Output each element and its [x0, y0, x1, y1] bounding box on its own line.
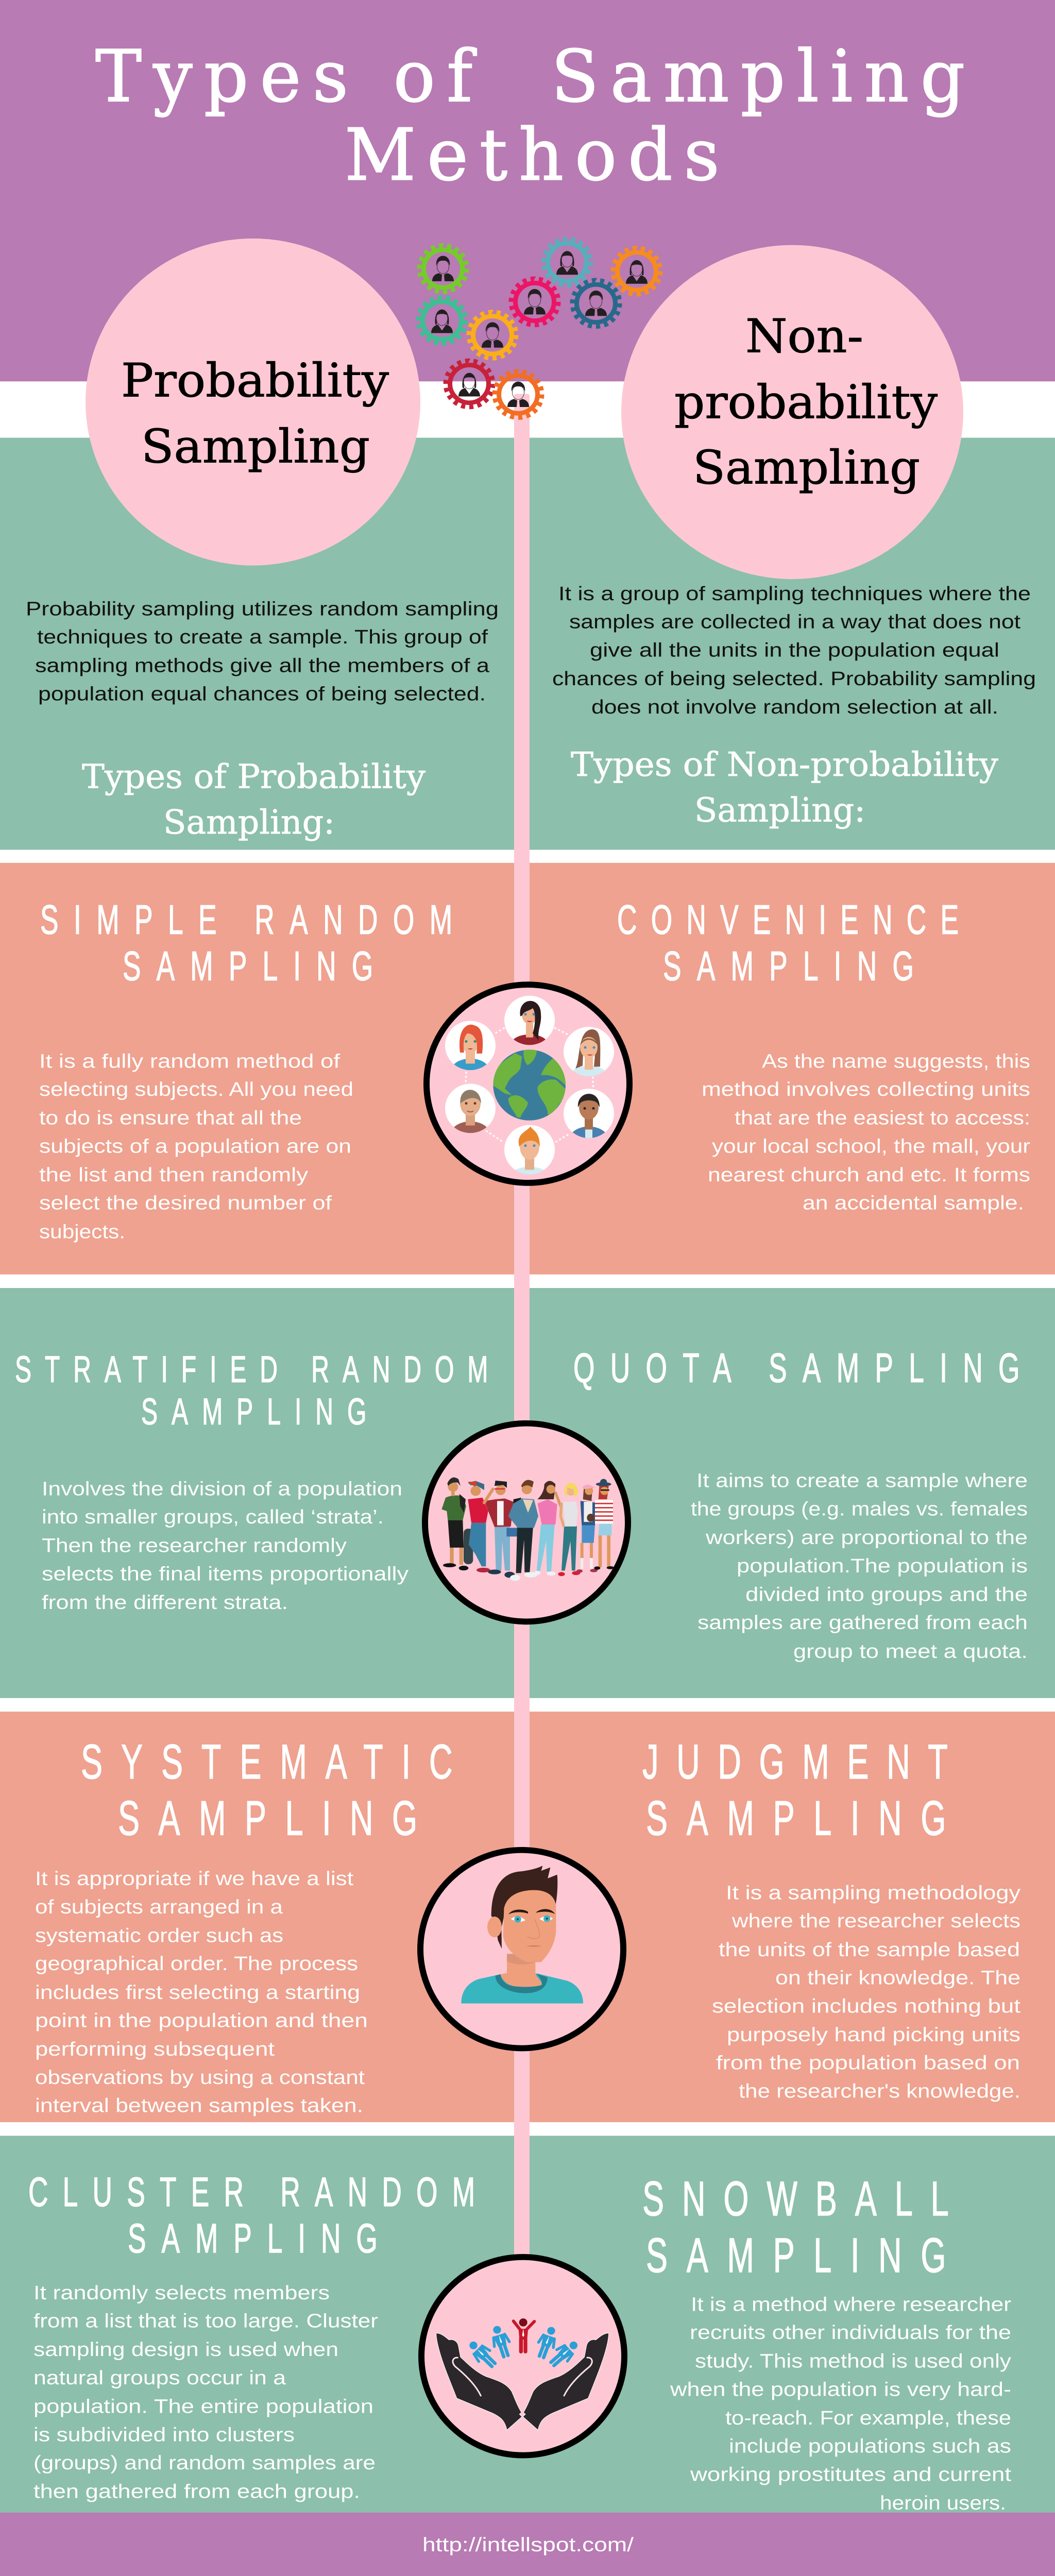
right hand [523, 2333, 609, 2430]
text: simple random description: subjects. [39, 1221, 125, 1243]
shirt [461, 1974, 583, 2004]
heading: convenience sampling: CONVENIENCE [617, 897, 959, 943]
text: snowball description: to-reach. For example, these [725, 2408, 1011, 2429]
heading: convenience sampling [617, 897, 959, 989]
heading: cluster random sampling [28, 2170, 475, 2262]
heading: types of probability sampling: Sampling: [163, 803, 335, 842]
text: convenience description: method involves collecting units [702, 1079, 1030, 1100]
text: cluster description: natural groups occur in a [33, 2367, 286, 2389]
heading: snowball sampling [642, 2171, 949, 2283]
icon: portrait of a man [420, 1850, 623, 2048]
text: simple random description: selecting subjects. All you need [39, 1079, 353, 1100]
text: snowball description: working prostitutes and current [690, 2464, 1011, 2485]
text: judgment description [712, 1882, 1021, 2102]
avatar: orange-haired man [504, 1125, 555, 1175]
text: judgment description: selection includes nothing but [712, 1995, 1020, 2017]
text: cluster description: from a list that is too large. Cluster [33, 2310, 378, 2332]
text: systematic description: observations by using a constant [35, 2067, 365, 2089]
text: stratified description: Involves the division of a population [42, 1478, 402, 1500]
avatar: brown-haired woman [564, 1027, 614, 1076]
avatar: grey-haired man [445, 1084, 496, 1133]
text: systematic description: interval between samples taken. [35, 2095, 363, 2116]
text: non-probability description: samples are collected in a way that does not [569, 612, 1020, 633]
text: stratified description: Then the researcher randomly [42, 1535, 347, 1556]
heading: convenience sampling: SAMPLING [663, 943, 914, 989]
heading: probability sampling [121, 354, 389, 473]
text: simple random description: the list and then randomly [39, 1164, 309, 1186]
text: stratified description [42, 1478, 409, 1614]
text: cluster description: sampling design is used when [33, 2339, 338, 2361]
text: stratified description: selects the final items proportionally [42, 1563, 409, 1585]
person 7 [576, 1485, 598, 1573]
text: probability description [26, 598, 499, 705]
text: non-probability description: It is a group of sampling techniques where the [558, 583, 1031, 605]
text: systematic description: geographical order. The process [35, 1953, 358, 1975]
text: snowball description: heroin users. [880, 2493, 1006, 2514]
heading: stratified random sampling: STRATIFIED RANDOM [15, 1348, 488, 1390]
text: convenience description: an accidental sample. [803, 1192, 1024, 1214]
hair [491, 1866, 557, 1949]
heading: systematic sampling: SYSTEMATIC [81, 1734, 453, 1789]
text: cluster description: population. The entire population [33, 2396, 373, 2417]
heading: snowball sampling: SAMPLING [646, 2228, 946, 2283]
heading: non-probability sampling: Sampling [693, 440, 920, 495]
text: convenience description: As the name suggests, this [762, 1050, 1030, 1072]
text: quota description: group to meet a quota. [793, 1641, 1028, 1663]
text: judgment description: the researcher's knowledge. [739, 2080, 1020, 2102]
heading: non-probability sampling: Non- [745, 310, 863, 363]
text: snowball description: when the population is very hard- [670, 2379, 1011, 2400]
text: systematic description: point in the population and then [35, 2010, 368, 2031]
heading: snowball sampling: SNOWBALL [642, 2171, 949, 2226]
neck [501, 1956, 542, 1988]
avatar: dark-haired woman [504, 995, 555, 1045]
text: systematic description: It is appropriate if we have a list [35, 1868, 353, 1890]
text: judgment description: from the population based on [716, 2052, 1020, 2074]
skateboard [464, 1529, 473, 1564]
person 6 [558, 1483, 580, 1576]
text: snowball description: It is a method where researcher [691, 2294, 1011, 2315]
text: cluster description: is subdivided into clusters [33, 2424, 295, 2446]
text: non-probability description: give all the units in the population equal [590, 639, 999, 661]
icon: hands holding people [421, 2257, 624, 2455]
text: snowball description [670, 2294, 1012, 2514]
text: simple random description: subjects of a population are on [39, 1136, 351, 1157]
central pink pole [514, 394, 530, 2265]
heading: systematic sampling: SAMPLING [118, 1791, 417, 1845]
heading: judgment sampling: SAMPLING [646, 1791, 946, 1845]
text: judgment description: on their knowledge. The [775, 1967, 1020, 1989]
person 5 [534, 1481, 560, 1575]
text: simple random description: It is a fully random method of [39, 1050, 340, 1072]
avatar: dark-haired man [564, 1089, 614, 1138]
heading: judgment sampling [642, 1734, 948, 1845]
title: Types of Sampling [95, 35, 965, 118]
heading: simple random sampling: SIMPLE RANDOM [40, 897, 452, 943]
face [503, 1890, 556, 1962]
icon: globe [466, 1027, 593, 1142]
icon: group of eight young people [425, 1423, 628, 1621]
text: non-probability description: chances of being selected. Probability sampling [552, 668, 1036, 690]
text: quota description: workers) are proportional to the [705, 1527, 1028, 1549]
heading: cluster random sampling: SAMPLING [128, 2216, 378, 2262]
heading: stratified random sampling: SAMPLING [141, 1391, 366, 1432]
red figure [514, 2318, 534, 2351]
text: convenience description [702, 1050, 1030, 1214]
heading: non-probability sampling: probability [674, 376, 938, 429]
heading: quota sampling: QUOTA SAMPLING [573, 1345, 1019, 1391]
heading: types of probability sampling: Types of Probability [82, 757, 426, 796]
text: judgment description: purposely hand picking units [727, 2024, 1020, 2046]
text: non-probability description: does not involve random selection at all. [591, 697, 998, 718]
icon: people gears cluster [418, 239, 660, 418]
text: snowball description: include populations such as [729, 2436, 1011, 2458]
avatar: red-haired woman [445, 1021, 496, 1071]
circle: non-probability sampling [621, 245, 963, 579]
heading: types of probability sampling [82, 757, 426, 842]
ear [487, 1917, 502, 1937]
text: systematic description: includes first selecting a starting [35, 1982, 360, 2004]
text: cluster description: It randomly selects members [33, 2282, 330, 2304]
heading: systematic sampling [81, 1734, 453, 1845]
text: cluster description: (groups) and random samples are [33, 2452, 376, 2474]
heading: simple random sampling: SAMPLING [123, 943, 373, 989]
text: snowball description: recruits other individuals for the [690, 2322, 1011, 2344]
person 2 [468, 1481, 490, 1572]
heading: types of non-probability sampling: Sampling: [694, 791, 865, 829]
heading: probability sampling: Probability [121, 354, 389, 408]
text: judgment description: It is a sampling methodology [726, 1882, 1021, 1904]
heading: types of non-probability sampling: Types of Non-probability [571, 745, 999, 784]
text: non-probability description [552, 583, 1036, 718]
icon: people around a globe [427, 985, 629, 1185]
text: judgment description: where the researcher selects [731, 1910, 1020, 1932]
person 4 [506, 1480, 538, 1581]
text: simple random description [39, 1050, 353, 1243]
heading: simple random sampling [40, 897, 452, 989]
text: systematic description [35, 1868, 368, 2116]
text: simple random description: to do is ensure that all the [39, 1107, 302, 1129]
title [95, 35, 965, 197]
text: stratified description: from the different strata. [42, 1592, 288, 1614]
circle: probability sampling [86, 239, 420, 566]
blue figures [465, 2324, 582, 2370]
heading: non-probability sampling [674, 310, 938, 495]
text: convenience description: nearest church and etc. It forms [708, 1164, 1030, 1186]
text: quota description: It aims to create a sample where [696, 1470, 1028, 1492]
text: systematic description: of subjects arranged in a [35, 1896, 283, 1918]
text: quota description: samples are gathered from each [697, 1612, 1028, 1634]
text: probability description: techniques to create a sample. This group of [37, 626, 488, 648]
text: probability description: sampling methods give all the members of a [35, 655, 489, 676]
person 1 [441, 1478, 468, 1570]
text: convenience description: your local school, the mall, your [712, 1136, 1030, 1157]
person 3 [484, 1481, 515, 1578]
text: quota description: divided into groups and the [745, 1584, 1028, 1605]
text: convenience description: that are the easiest to access: [735, 1107, 1030, 1129]
heading: cluster random sampling: CLUSTER RANDOM [28, 2170, 475, 2215]
text: quota description: the groups (e.g. males vs. females [691, 1498, 1028, 1520]
text: stratified description: into smaller groups, called ‘strata’. [42, 1506, 384, 1528]
text: snowball description: study. This method is used only [695, 2350, 1012, 2372]
text: simple random description: select the desired number of [39, 1192, 332, 1214]
footer source link: http://intellspot.com/ [422, 2534, 634, 2556]
heading: judgment sampling: JUDGMENT [642, 1734, 948, 1789]
text: quota description: population.The population is [737, 1555, 1028, 1577]
text: cluster description: then gathered from each group. [33, 2481, 360, 2502]
text: probability description: population equal chances of being selected. [38, 683, 486, 705]
heading: stratified random sampling [15, 1348, 488, 1432]
heading: types of non-probability sampling [571, 745, 999, 829]
heading: probability sampling: Sampling [141, 419, 370, 473]
title: Methods [345, 114, 720, 197]
person 8 [594, 1479, 614, 1570]
text: systematic description: performing subsequent [35, 2039, 275, 2060]
left hand [436, 2333, 522, 2430]
text: judgment description: the units of the sample based [719, 1939, 1020, 1961]
text: systematic description: systematic order such as [35, 1925, 283, 1946]
text: quota description [691, 1470, 1028, 1663]
text: probability description: Probability sampling utilizes random sampling [26, 598, 499, 620]
text: cluster description [33, 2282, 378, 2502]
